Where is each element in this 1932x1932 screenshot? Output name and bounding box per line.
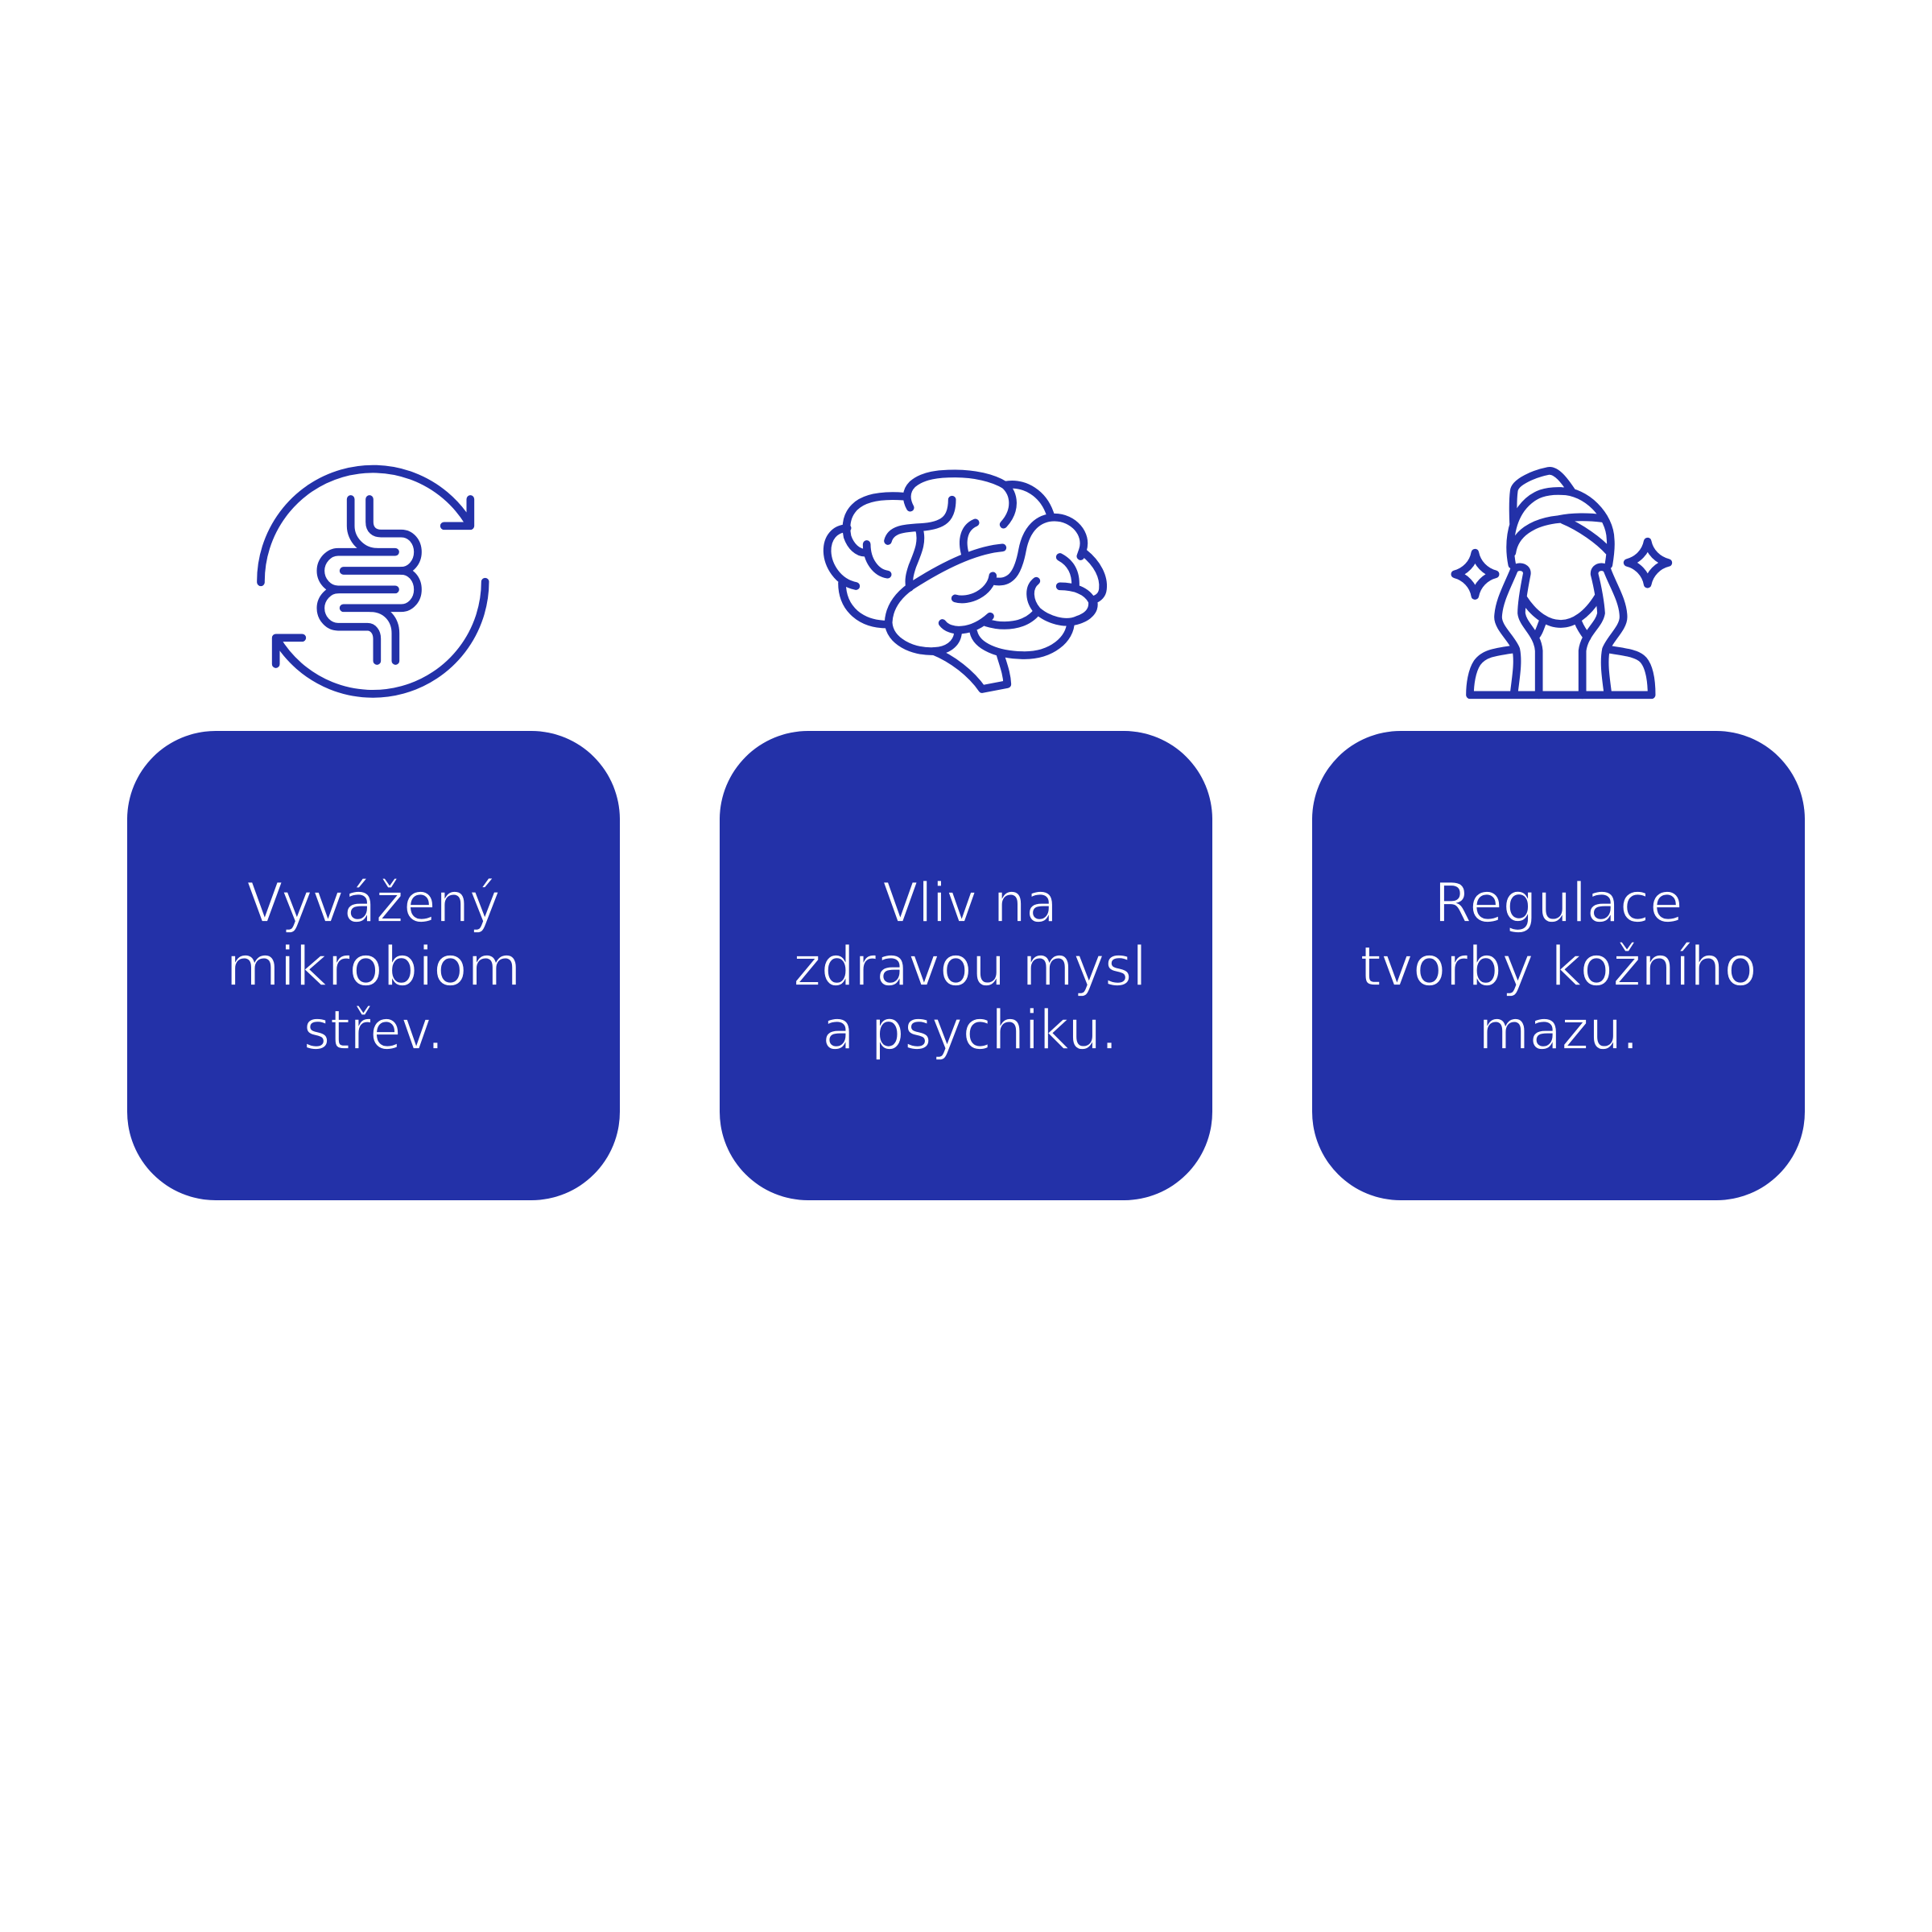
text: influence on mind and psyche <box>794 872 1146 1063</box>
card background: brain <box>720 731 1212 1200</box>
text: balanced gut microbiome: mikrobiom <box>225 935 522 999</box>
text: sebum production regulation: Regulace <box>1435 872 1682 935</box>
icon: brain <box>828 473 1103 689</box>
text: sebum production regulation <box>1360 872 1757 1063</box>
icon: woman with towel and sparkles <box>1455 471 1668 695</box>
text: sebum production regulation: mazu. <box>1478 999 1639 1063</box>
panel: mental health <box>720 731 1212 1200</box>
text: sebum production regulation: tvorby kožního <box>1360 935 1757 999</box>
text: influence on mind and psyche: zdravou mysl <box>794 935 1146 999</box>
text: balanced gut microbiome: Vyvážený <box>246 872 501 935</box>
panel: sebum regulation <box>1312 731 1805 1200</box>
text: balanced gut microbiome: střev. <box>303 999 444 1063</box>
card background: skin <box>1312 731 1805 1200</box>
panel: gut microbiome <box>127 731 620 1200</box>
text: influence on mind and psyche: Vliv na <box>882 872 1058 935</box>
text: influence on mind and psyche: a psychiku. <box>823 999 1117 1063</box>
text: balanced gut microbiome <box>225 872 522 1063</box>
card background: gut <box>127 731 620 1200</box>
icon: intestine with circular arrows <box>261 469 485 694</box>
